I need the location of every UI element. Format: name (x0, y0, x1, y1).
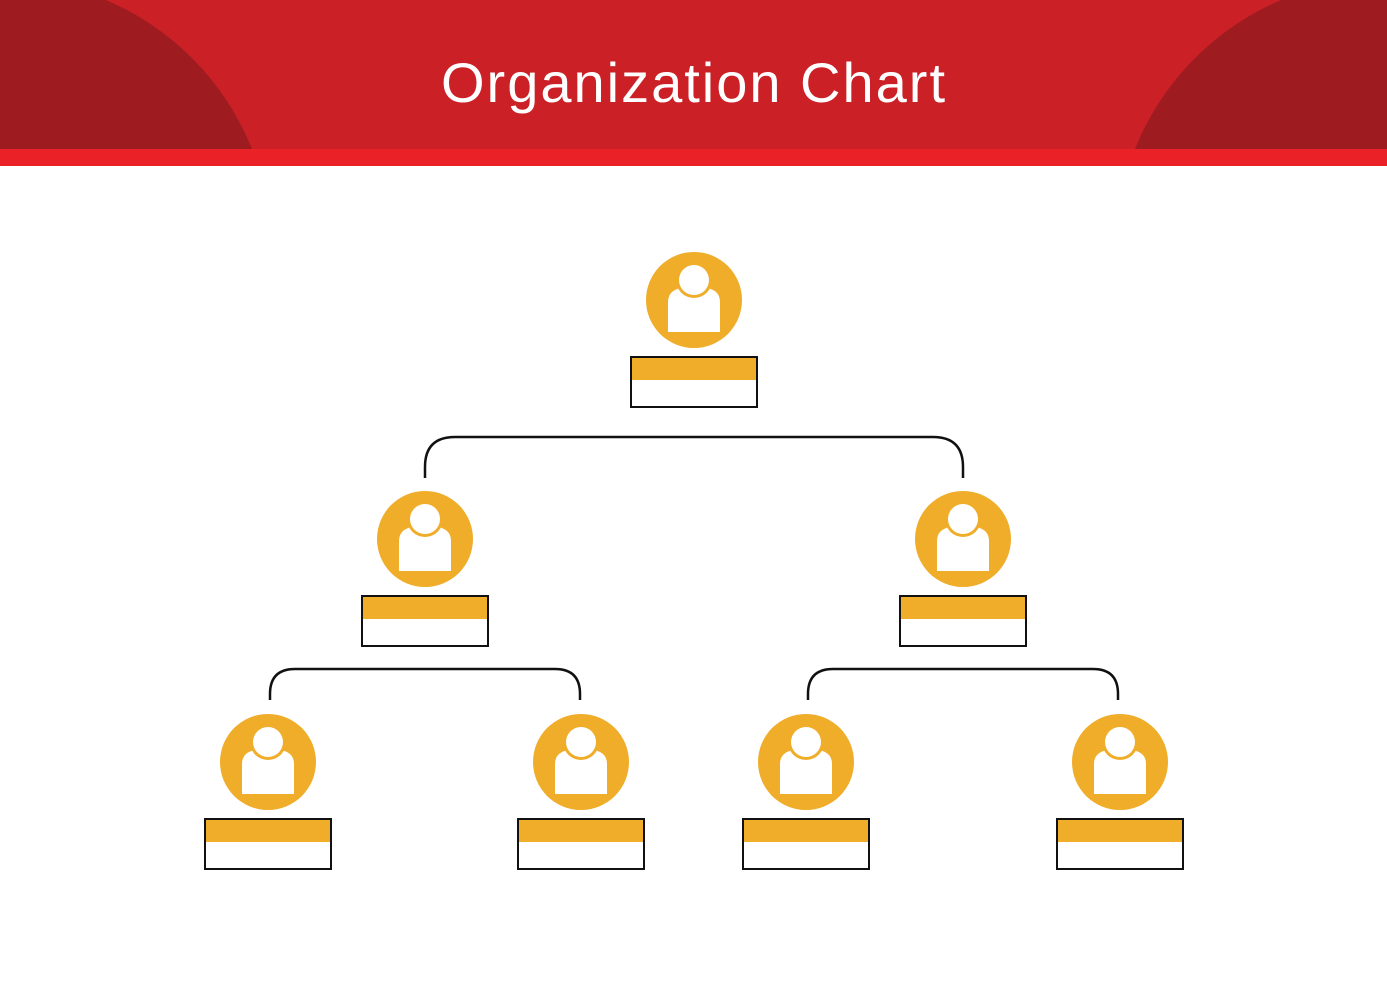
header banner (0, 0, 1387, 166)
node: level 2 left (362, 491, 488, 646)
node: level 2 right (900, 491, 1026, 646)
node: top (631, 252, 757, 407)
node: level 3 c (743, 714, 869, 869)
title: Organization Chart (441, 51, 947, 114)
node: level 3 b (518, 714, 644, 869)
connector: top level (425, 437, 963, 478)
node: level 3 d (1057, 714, 1183, 869)
node: level 3 a (205, 714, 331, 869)
connector: right branch (808, 669, 1118, 700)
connector: left branch (270, 669, 580, 700)
